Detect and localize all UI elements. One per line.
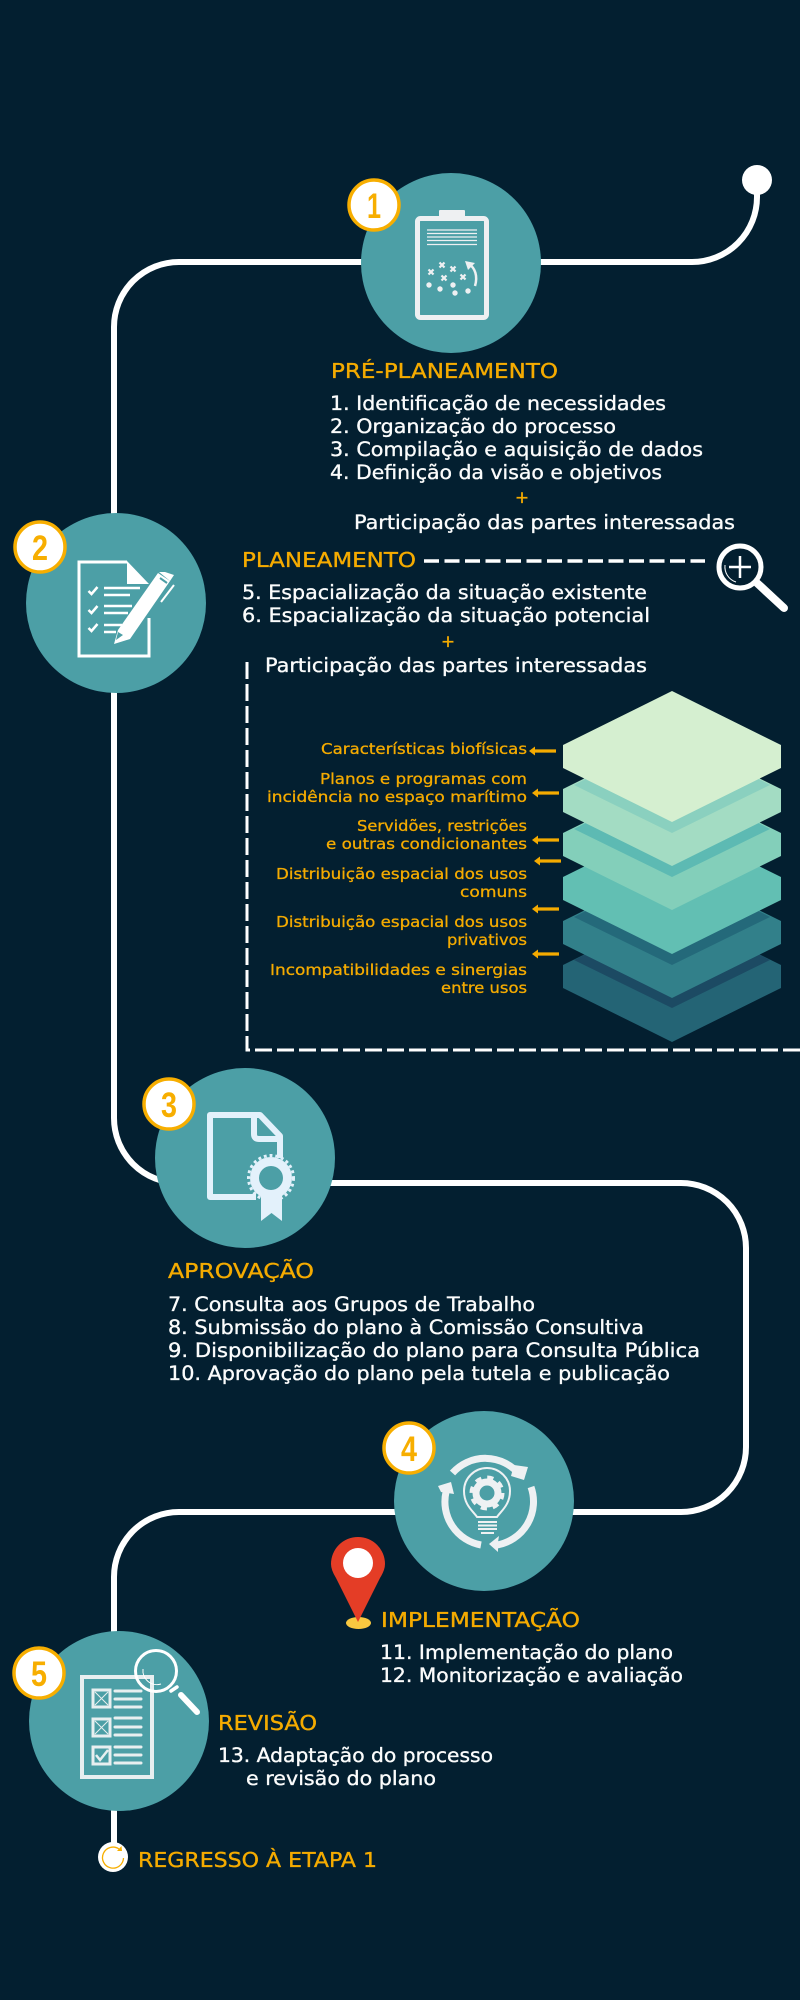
step 2 number badge — [15, 522, 65, 572]
layer labels: Distribuição espacial dos usos — [276, 913, 527, 931]
step 4 list: 11. Implementação do plano — [380, 1641, 673, 1664]
step 3 list: 7. Consulta aos Grupos de Trabalho — [168, 1293, 535, 1316]
layer labels — [267, 740, 527, 997]
step 1 list: 3. Compilação e aquisição de dados — [330, 438, 703, 461]
heading: aprovacao: APROVAÇÃO — [168, 1257, 314, 1283]
icon: certified document — [210, 1114, 294, 1221]
participation text: Participação das partes interessadas — [265, 654, 647, 677]
arrows: labels to layers — [529, 746, 561, 958]
panel: step 5 revisao — [14, 1631, 493, 1811]
icon: checklist with magnifier — [82, 1650, 197, 1777]
dashed detail frame — [247, 662, 800, 1050]
panel: step 1 pre-planeamento — [330, 173, 735, 534]
layer labels: Características biofísicas — [321, 740, 527, 758]
layer labels: Planos e programas com — [320, 770, 527, 788]
return to step 1 — [98, 1842, 377, 1872]
step 4 number badge: 4 — [401, 1430, 417, 1469]
step 5 circle — [29, 1631, 209, 1811]
timeline connector path — [114, 180, 757, 1857]
layer labels: comuns — [460, 883, 527, 901]
step 4 number badge — [384, 1423, 434, 1473]
step 4 list — [380, 1641, 683, 1687]
step 5 list: 13. Adaptação do processo — [218, 1744, 493, 1767]
panel: step 2 planeamento — [15, 513, 800, 1050]
layer labels: entre usos — [441, 979, 527, 997]
timeline start dot — [742, 165, 772, 195]
heading: revisao: REVISÃO — [218, 1709, 317, 1735]
step 1 number badge: 1 — [367, 187, 381, 226]
step 3 list: 9. Disponibilização do plano para Consulta Pública — [168, 1339, 700, 1362]
step 5 list — [218, 1744, 493, 1790]
step 2 list: 6. Espacialização da situação potencial — [242, 604, 650, 627]
step 2 list: 5. Espacialização da situação existente — [242, 581, 647, 604]
step 5 number badge: 5 — [31, 1655, 47, 1694]
layer 4 — [563, 823, 781, 954]
step 5 number badge — [14, 1648, 64, 1698]
step 1 list — [330, 392, 703, 484]
icon: checklist document with pen — [79, 561, 174, 656]
step 4 list: 12. Monitorização e avaliação — [380, 1664, 683, 1687]
step 3 list: 10. Aprovação do plano pela tutela e publicação — [168, 1362, 670, 1385]
step 1 list: 2. Organização do processo — [330, 415, 616, 438]
step 3 circle — [155, 1068, 335, 1248]
panel: step 4 implementacao — [331, 1411, 683, 1687]
step 4 circle — [394, 1411, 574, 1591]
icon: map pin — [331, 1537, 385, 1629]
layer labels: Servidões, restrições — [357, 817, 527, 835]
layer labels: Incompatibilidades e sinergias — [270, 961, 527, 979]
chart: stacked layers — [563, 691, 781, 1042]
layer 6 — [563, 911, 781, 1042]
layer labels: Distribuição espacial dos usos — [276, 865, 527, 883]
layer 5 — [563, 867, 781, 998]
icon: return circular arrow — [98, 1842, 128, 1872]
heading: implementacao: IMPLEMENTAÇÃO — [381, 1606, 580, 1632]
heading: planeamento: PLANEAMENTO — [242, 548, 416, 572]
icon: light bulb gear cycle — [438, 1458, 534, 1552]
label: regresso: REGRESSO À ETAPA 1 — [138, 1847, 377, 1872]
dashed leader to magnifier — [424, 559, 705, 563]
layer 2 — [563, 735, 781, 866]
step 3 number badge — [144, 1079, 194, 1129]
layer 1 — [563, 691, 781, 822]
heading: pre-planeamento: PRÉ-PLANEAMENTO — [331, 358, 558, 383]
plus sign: + — [441, 632, 455, 652]
step 2 circle — [26, 513, 206, 693]
layer 3 — [563, 779, 781, 910]
step 3 number badge: 3 — [161, 1086, 177, 1125]
participation text: Participação das partes interessadas — [354, 511, 735, 534]
layer labels: privativos — [447, 931, 527, 949]
layer labels: e outras condicionantes — [326, 835, 527, 853]
icon: magnifier with plus — [719, 546, 784, 608]
step 1 number badge — [349, 180, 399, 230]
step 1 circle — [361, 173, 541, 353]
layer labels: incidência no espaço marítimo — [267, 788, 527, 806]
panel: step 3 aprovacao — [144, 1068, 700, 1385]
step 3 list: 8. Submissão do plano à Comissão Consultiva — [168, 1316, 644, 1339]
step 1 list: 1. Identificação de necessidades — [330, 392, 666, 415]
step 2 number badge: 2 — [32, 529, 48, 568]
step 5 list: e revisão do plano — [246, 1767, 436, 1790]
step 1 list: 4. Definição da visão e objetivos — [330, 461, 662, 484]
plus sign: + — [515, 488, 529, 508]
step 2 list — [242, 581, 650, 627]
step 3 list — [168, 1293, 700, 1385]
icon: clipboard with play diagram — [418, 210, 486, 318]
